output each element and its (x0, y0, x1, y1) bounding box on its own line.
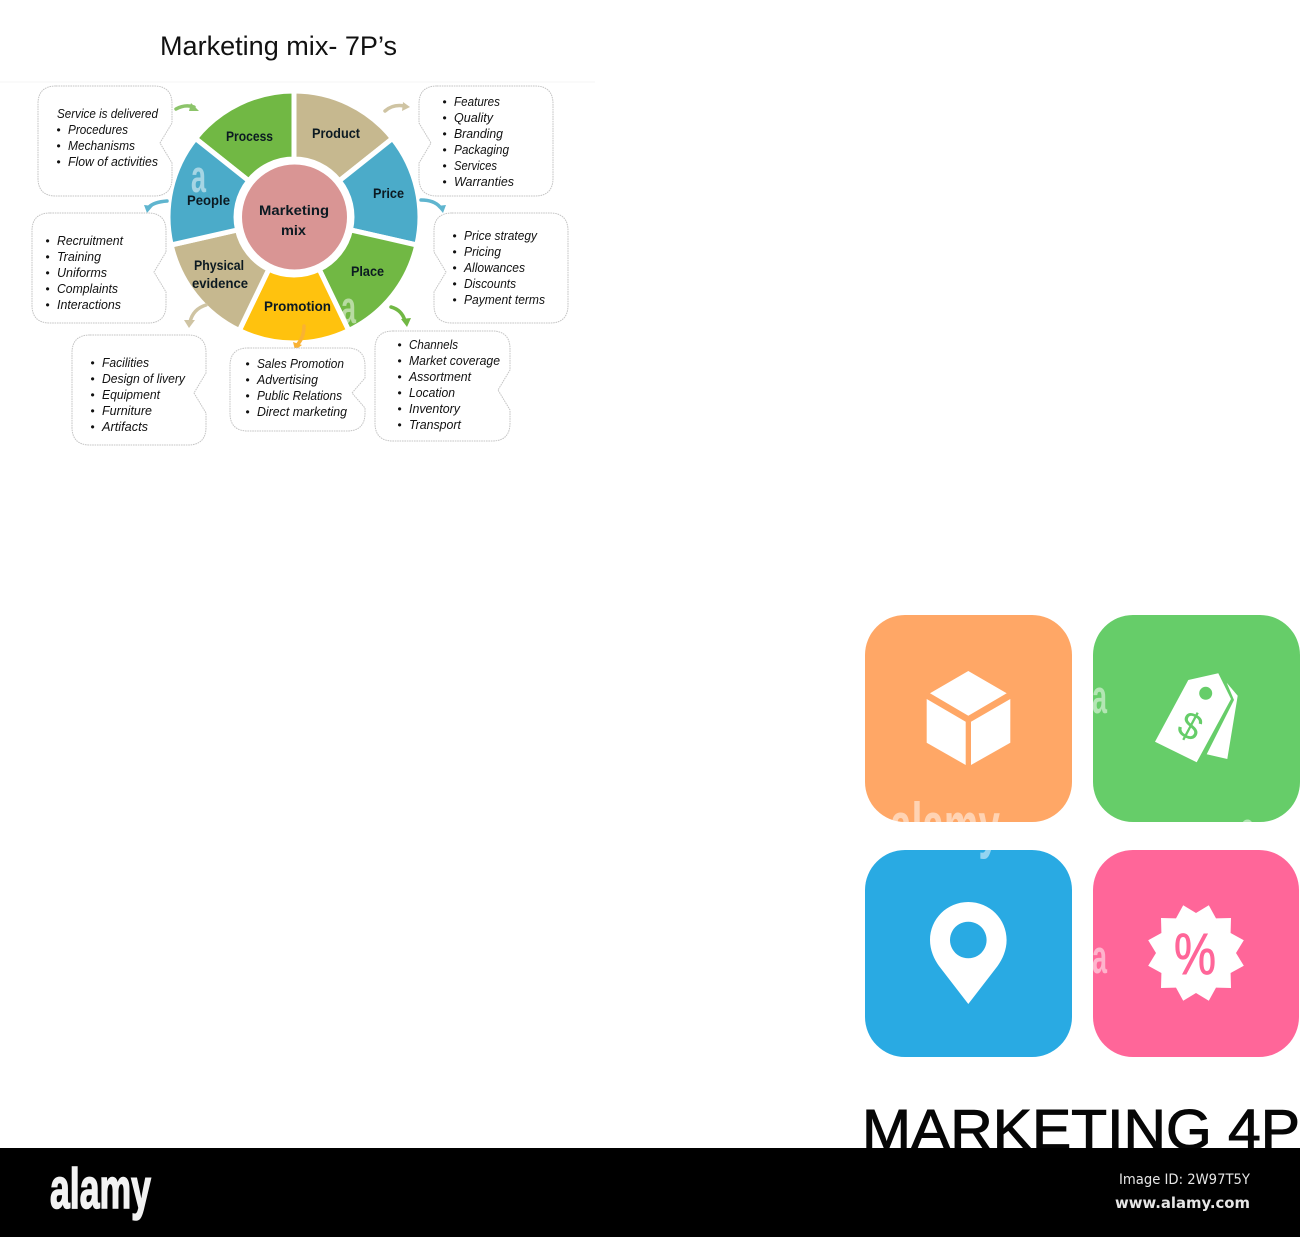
label: Price: Price (373, 185, 404, 201)
arrow: Process (176, 103, 199, 111)
image id: Image ID: 2W97T5Y (1119, 1172, 1250, 1188)
callout: Physical evidence: • (90, 356, 95, 370)
callout: People: Uniforms (57, 266, 107, 280)
center circle: Marketing mix (242, 164, 347, 270)
label: Place: Place (351, 263, 384, 279)
callout: Physical evidence: • (90, 404, 95, 418)
watermark letter: green tile bottom: a (1240, 802, 1255, 855)
icon: price tags (1155, 673, 1238, 762)
callout: Product: • (442, 111, 447, 125)
arrow: Product (385, 102, 410, 111)
label: Promotion: Promotion (264, 298, 331, 314)
callout: Place: Market coverage (409, 354, 500, 368)
watermark letter: green tile: a (1092, 670, 1107, 723)
callout: Place: • (398, 386, 402, 400)
callout: Promotion: Sales Promotion (257, 357, 344, 371)
callout: Process: • (56, 139, 61, 153)
callout: Process: • (56, 155, 61, 169)
footer bar (0, 1148, 1300, 1237)
callout: People: • (46, 250, 50, 264)
segment: People (168, 138, 249, 245)
callout: Promotion (230, 348, 365, 431)
callout: People: Recruitment (57, 234, 124, 248)
tile: promotion badge (1093, 850, 1299, 1057)
tile: price tag (1093, 615, 1300, 822)
callout: Physical evidence: Equipment (102, 388, 161, 402)
segment: Promotion (239, 269, 349, 343)
watermark letter: pink tile: a (1092, 930, 1107, 983)
callout: Promotion: • (246, 357, 250, 371)
callout: Price: Discounts (464, 277, 516, 291)
callout: Place: • (398, 402, 402, 416)
callout: Place: • (398, 370, 402, 384)
callout: Price: Price strategy (464, 229, 538, 243)
callout: Price (434, 213, 568, 323)
arrow: Physical evidence (184, 305, 206, 328)
callout: Promotion: • (246, 373, 250, 387)
tile: product cube (865, 615, 1072, 822)
title: Marketing mix 7P's: Marketing mix- 7P’s (160, 31, 397, 61)
callout: Product: Services (454, 159, 497, 173)
callout: Place: Transport (409, 418, 462, 432)
label: Physical evidence (192, 257, 248, 291)
callout: Product (419, 86, 553, 196)
heading: MARKETING 4P: MARKETING 4P (862, 1098, 1300, 1162)
callout: Price: • (452, 261, 457, 275)
label: Product: Product (312, 125, 360, 141)
segment: Place (319, 230, 417, 330)
label: People: People (187, 192, 230, 208)
icon: percent badge (1148, 905, 1244, 1001)
callout: Place: • (398, 418, 402, 432)
label: Process: Process (226, 128, 273, 144)
callout: Product: Packaging (454, 143, 509, 157)
callout: People: Training (57, 250, 101, 264)
callout: Process: Procedures (68, 123, 128, 137)
callout: Price: • (452, 293, 457, 307)
center label: Marketing (259, 202, 329, 218)
callout: Product: • (442, 175, 447, 189)
callout: People: • (46, 234, 50, 248)
arrow: Price (421, 200, 446, 213)
logo: alamy: alamy (50, 1157, 151, 1221)
callout: Physical evidence: • (90, 420, 95, 434)
icon: map pin (930, 902, 1007, 1004)
callout: Promotion: Direct marketing (257, 405, 347, 419)
callout: Promotion: • (246, 389, 250, 403)
callout: Price: • (452, 277, 457, 291)
callout: Product: • (442, 127, 447, 141)
callout: Product: • (442, 143, 447, 157)
callout: Price: • (452, 229, 457, 243)
icon: percent badge: % (1174, 922, 1216, 987)
callout: People: • (46, 298, 50, 312)
callout: Place: Assortment (408, 370, 472, 384)
callout: Process: • (56, 123, 61, 137)
callout: People: • (46, 266, 50, 280)
tile: place pin (865, 850, 1072, 1057)
watermark letter on People: a (191, 151, 207, 202)
label: Physical evidence: evidence (192, 275, 248, 291)
label: Physical evidence: Physical (194, 257, 244, 273)
watermark: alamy across tiles: alamy (890, 791, 1000, 860)
callout: Physical evidence: • (90, 388, 95, 402)
arrow: People (144, 201, 167, 213)
arrow: Place (391, 307, 411, 327)
callout: Promotion: • (246, 405, 250, 419)
callout: Place (375, 331, 510, 441)
callout: Place: • (398, 338, 402, 352)
callout: Promotion: Public Relations (257, 389, 342, 403)
watermark letter on Place: a (341, 282, 357, 333)
callout: People: Complaints (57, 282, 118, 296)
callout: Process (38, 86, 172, 196)
callout: People: • (46, 282, 50, 296)
callout: People: Interactions (57, 298, 121, 312)
callout: Product: Quality (454, 111, 494, 125)
callout: Physical evidence: Facilities (102, 356, 149, 370)
callout: Product: Warranties (454, 175, 514, 189)
center label: mix (281, 222, 306, 238)
callout: Place: Channels (409, 338, 458, 352)
callout: Product: Branding (454, 127, 503, 141)
callout: Process: Service is delivered (57, 107, 159, 121)
callout: Price: Pricing (464, 245, 501, 259)
callout: Physical evidence: Artifacts (101, 420, 148, 434)
segment: Price (339, 138, 420, 245)
center label (259, 202, 329, 238)
callout: Place: Location (409, 386, 455, 400)
callout: Physical evidence: Design of livery (102, 372, 186, 386)
callout: Product: • (442, 95, 447, 109)
callout: Process: Mechanisms (68, 139, 135, 153)
segment: Process (196, 91, 294, 181)
callout: Product: Features (454, 95, 500, 109)
callout: Promotion: Advertising (256, 373, 318, 387)
arrow: Promotion (293, 326, 304, 350)
callout: Physical evidence: • (90, 372, 95, 386)
segment: Physical evidence (171, 230, 269, 330)
callout: Price: Allowances (463, 261, 525, 275)
callout: Price: • (452, 245, 457, 259)
callout: Physical evidence: Furniture (102, 404, 152, 418)
callout: Place: • (398, 354, 402, 368)
icon: price tags: $ (1171, 703, 1209, 750)
website: www.alamy.com (1115, 1194, 1250, 1212)
callout: Physical evidence (72, 335, 206, 445)
callout: Price: Payment terms (464, 293, 545, 307)
callout: Place: Inventory (409, 402, 461, 416)
callout: Process: Flow of activities (68, 155, 158, 169)
segment: Product (294, 91, 392, 181)
callout: People (32, 213, 166, 323)
wheel diagram: marketing mix (168, 91, 420, 343)
callout: Product: • (442, 159, 447, 173)
icon: cube (927, 671, 1010, 765)
